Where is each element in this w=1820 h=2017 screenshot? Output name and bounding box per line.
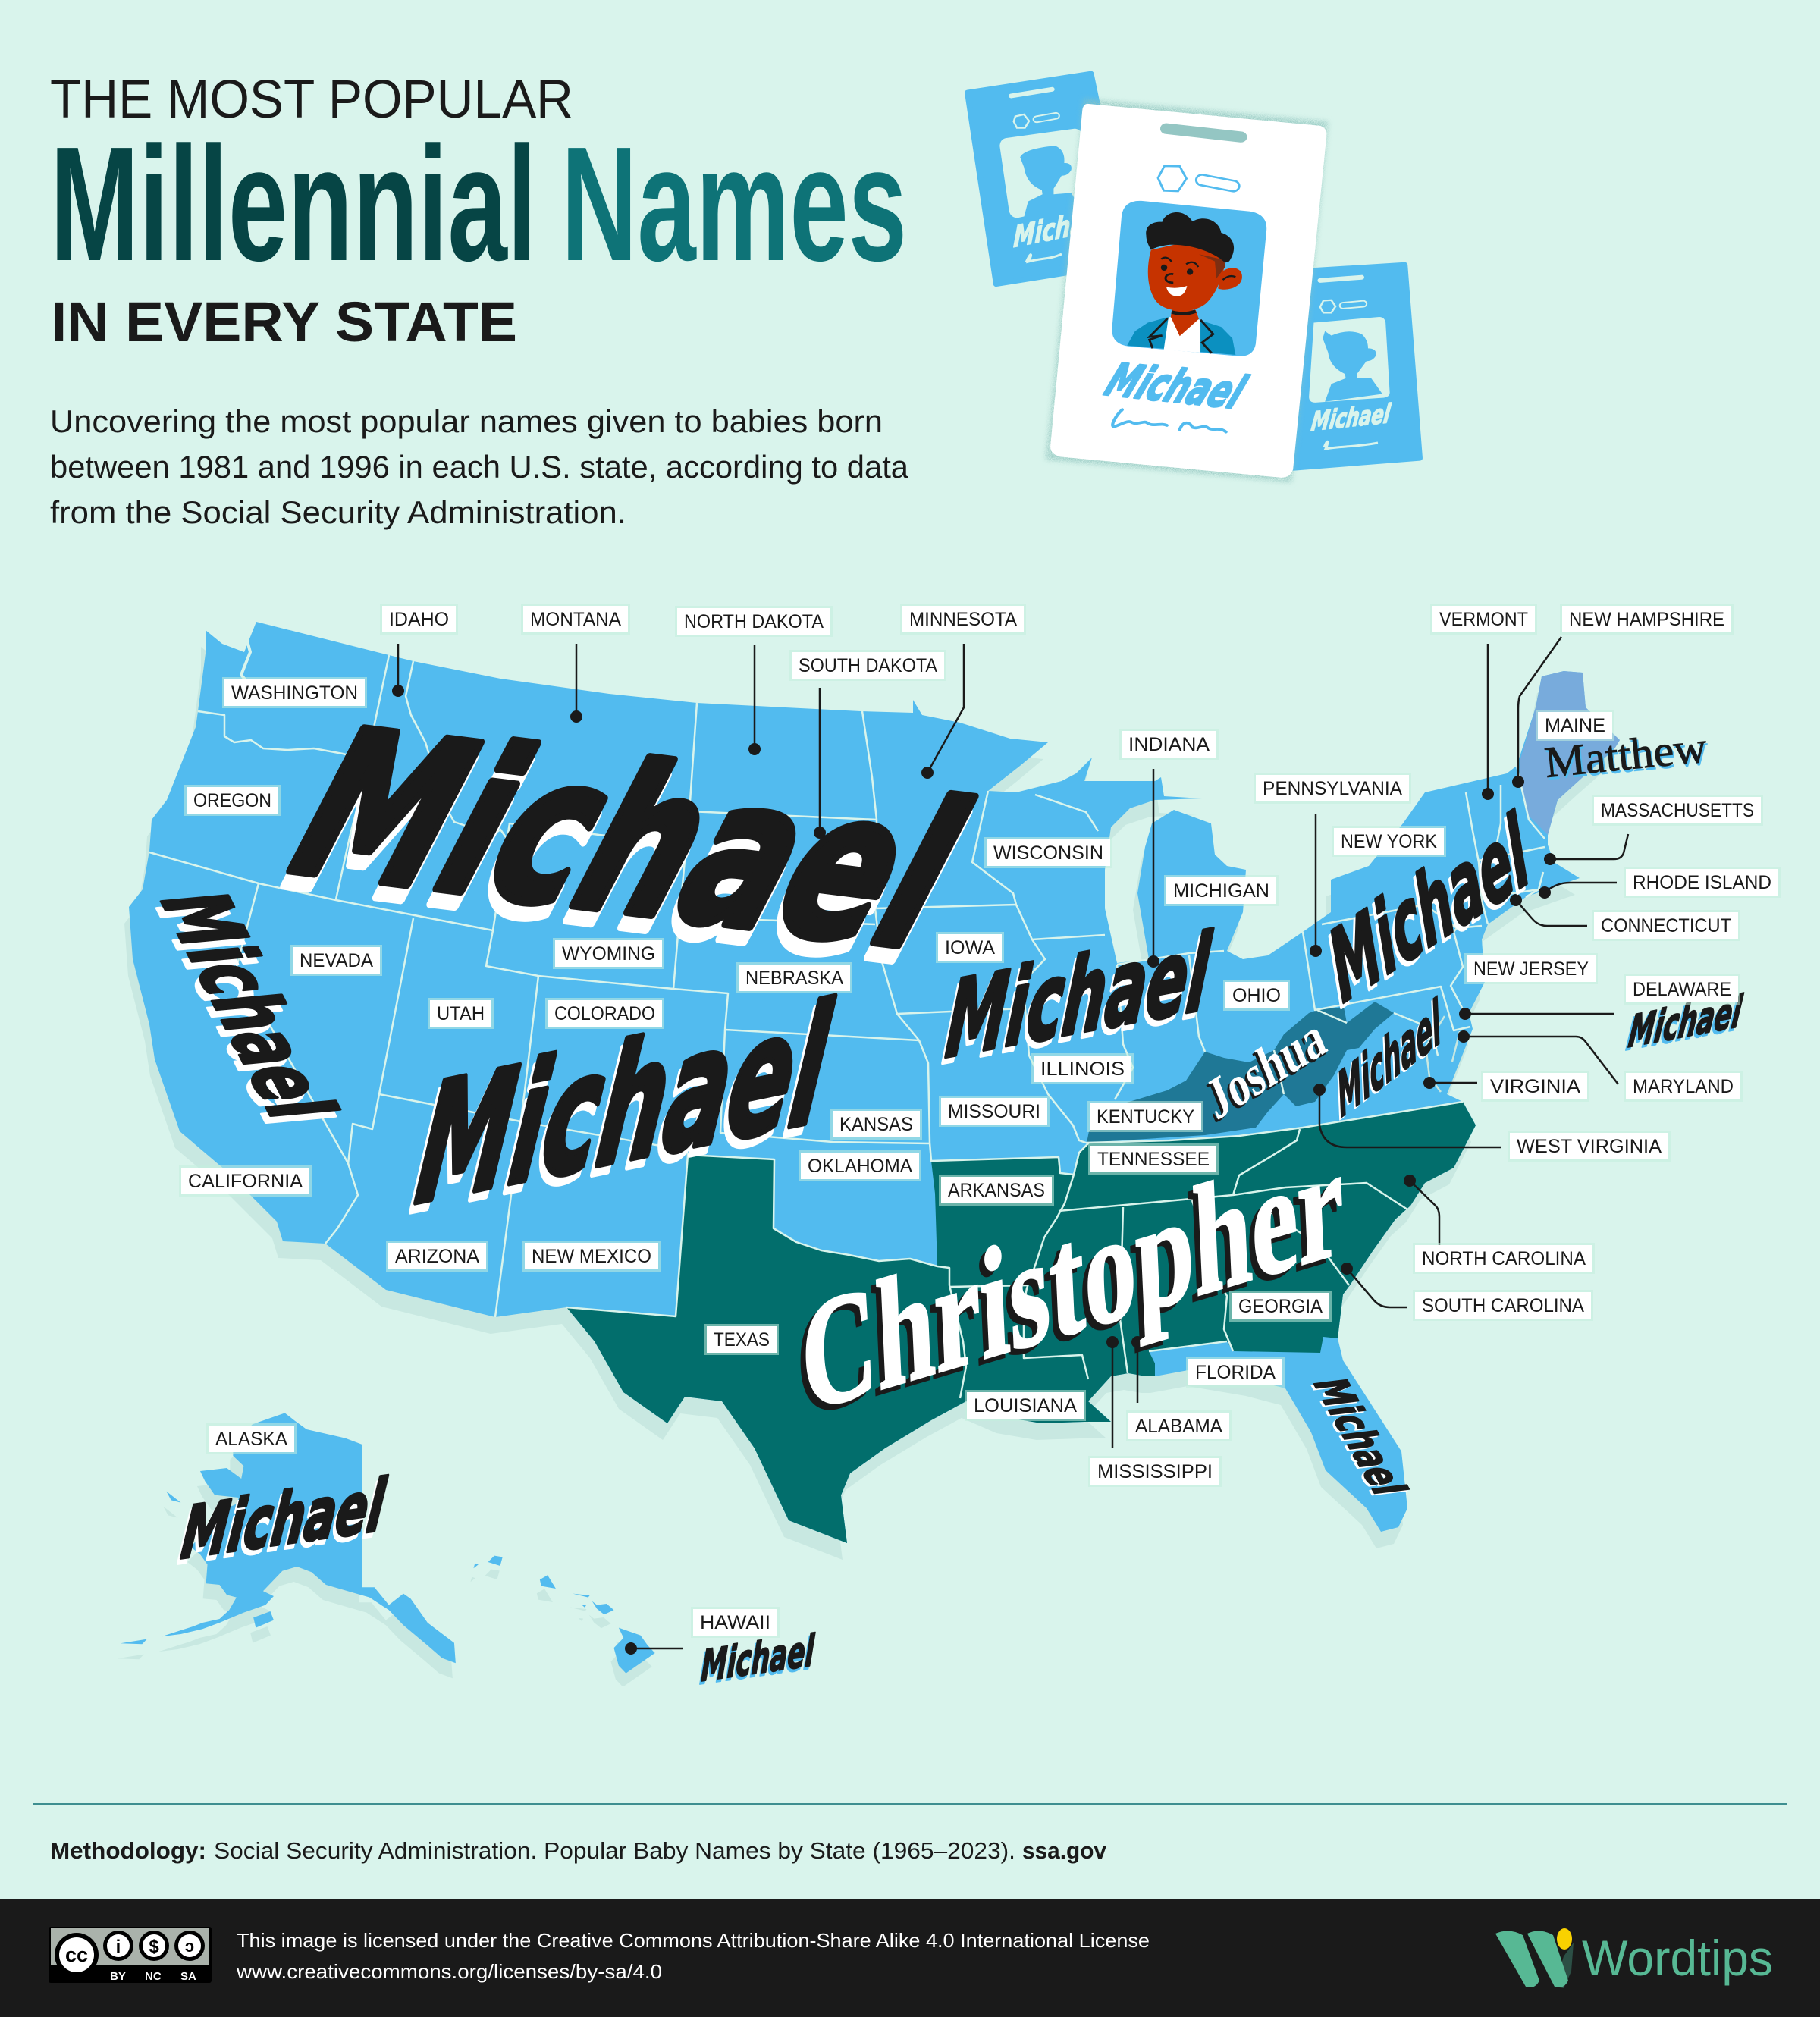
name: michael (new york and northeast): Michael — [1320, 794, 1539, 1026]
name: michael (delaware and maryland) — [1624, 986, 1745, 1061]
leader: delaware — [1459, 1008, 1614, 1020]
name: michael (midwest): Michael — [939, 918, 1213, 1088]
label: arkansas — [939, 1175, 1054, 1206]
name: michael (northwest, large): Michael — [263, 701, 982, 1010]
label: nevada: NEVADA — [300, 950, 373, 971]
name: michael (central states): Michael — [408, 968, 839, 1241]
label: kentucky — [1087, 1101, 1203, 1132]
label: texas — [704, 1324, 779, 1355]
label: tennessee — [1088, 1143, 1219, 1175]
intro paragraph: between 1981 and 1996 in each U.S. state, according to data — [50, 449, 909, 485]
leader: new hampshire — [1512, 637, 1561, 788]
methodology note: Social Security Administration. Popular Baby Names by State (1965–2023). — [214, 1837, 1015, 1864]
title line: the most popular: THE MOST POPULAR — [50, 70, 573, 130]
label: north carolina — [1413, 1243, 1595, 1274]
name: joshua (kentucky and west virginia): Joshua — [1197, 1005, 1334, 1133]
name: michael (central states) — [403, 968, 839, 1250]
icon: creative commons badge: NC — [145, 1970, 162, 1983]
map: hawaii — [470, 1556, 655, 1687]
leader: south carolina — [1341, 1263, 1407, 1307]
label: tennessee: TENNESSEE — [1097, 1149, 1210, 1170]
name: michael (alaska) — [174, 1464, 390, 1581]
state borders — [149, 629, 1545, 1398]
name: michael (alaska): Michael — [177, 1464, 390, 1576]
map: contiguous united states — [124, 622, 1620, 1560]
label: louisiana: LOUISIANA — [974, 1395, 1077, 1416]
label: rhode island — [1624, 867, 1781, 898]
footer band — [0, 1899, 1820, 2017]
label: florida: FLORIDA — [1195, 1362, 1276, 1383]
name: michael (alaska): Michael — [174, 1470, 387, 1581]
label: alabama: ALABAMA — [1135, 1416, 1222, 1437]
label: hawaii — [691, 1607, 780, 1638]
leader: connecticut — [1510, 894, 1587, 926]
intro paragraph: from the Social Security Administration. — [50, 494, 626, 530]
label: vermont: VERMONT — [1439, 609, 1528, 630]
label: utah: UTAH — [437, 1003, 485, 1024]
label: new york: NEW YORK — [1341, 831, 1437, 852]
label: minnesota — [900, 604, 1026, 635]
label: california: CALIFORNIA — [188, 1171, 303, 1192]
name: christopher (south): Christopher — [792, 1118, 1341, 1452]
icon: creative commons badge: i — [116, 1937, 121, 1957]
label: colorado: COLORADO — [554, 1003, 655, 1024]
region: michael states — [129, 622, 1620, 1543]
label: wisconsin — [984, 837, 1112, 868]
name: michael (florida) — [1301, 1373, 1416, 1502]
label: texas: TEXAS — [714, 1329, 770, 1350]
icon: creative commons badge: cc — [65, 1943, 88, 1966]
label: virginia — [1481, 1071, 1589, 1102]
label: arkansas: ARKANSAS — [948, 1180, 1045, 1201]
label: maine — [1536, 710, 1614, 741]
id card: main with portrait — [1046, 99, 1328, 482]
label: georgia: GEORGIA — [1238, 1296, 1323, 1317]
name: joshua (kentucky and west virginia): Joshua — [1195, 1008, 1332, 1136]
methodology note: Methodology: — [50, 1837, 206, 1864]
leader: virginia — [1423, 1077, 1477, 1089]
label: missouri — [939, 1096, 1050, 1127]
label: michigan: MICHIGAN — [1173, 880, 1269, 902]
label: washington: WASHINGTON — [231, 682, 358, 704]
label: wisconsin: WISCONSIN — [993, 842, 1103, 864]
label: south dakota — [789, 650, 946, 681]
label: new jersey: NEW JERSEY — [1473, 958, 1589, 980]
id card: right: Michael — [1310, 399, 1393, 438]
label: north carolina: NORTH CAROLINA — [1422, 1248, 1586, 1269]
leader: north carolina — [1404, 1175, 1439, 1246]
label: mississippi — [1088, 1456, 1222, 1487]
name: christopher (south): Christopher — [798, 1112, 1347, 1446]
name: matthew (maine): Matthew — [1544, 724, 1710, 789]
name: michael (virginia): Michael — [1332, 990, 1443, 1134]
label: pennsylvania — [1254, 773, 1411, 804]
name: christopher (south) — [792, 1112, 1347, 1452]
divider line — [33, 1803, 1787, 1805]
leader: pennsylvania — [1310, 814, 1322, 957]
name: michael (florida): Michael — [1303, 1373, 1416, 1501]
leader: massachusetts — [1544, 834, 1628, 865]
label: kansas — [830, 1109, 922, 1140]
icon: creative commons badge: ɔ — [185, 1937, 194, 1956]
label: virginia: VIRGINIA — [1490, 1076, 1580, 1097]
leader: montana — [570, 644, 582, 723]
leader: vermont — [1482, 644, 1494, 800]
label: connecticut — [1592, 910, 1740, 941]
title line: millennial: Millennial — [50, 112, 537, 295]
label: montana — [521, 604, 630, 635]
label: new mexico — [522, 1241, 661, 1272]
license text: www.creativecommons.org/licenses/by-sa/4.0 — [236, 1960, 662, 1983]
label: new mexico: NEW MEXICO — [532, 1246, 651, 1267]
label: maryland: MARYLAND — [1633, 1076, 1734, 1097]
label: wyoming — [553, 938, 664, 969]
label: ohio — [1223, 980, 1290, 1011]
leader: mississippi — [1106, 1336, 1119, 1448]
label: colorado — [545, 998, 664, 1029]
name: michael (central states): Michael — [403, 977, 835, 1250]
name: michael (hawaii): Michael — [698, 1630, 814, 1695]
title — [50, 70, 907, 353]
label: south carolina: SOUTH CAROLINA — [1422, 1295, 1584, 1316]
name: michael (florida): Michael — [1301, 1375, 1414, 1502]
region: kentucky and west virginia (joshua) — [1087, 1002, 1394, 1143]
name: matthew (maine): Matthew — [1542, 722, 1709, 787]
label: michigan — [1164, 875, 1279, 906]
leader: south dakota — [814, 688, 826, 839]
name on main card: Michael — [1098, 354, 1254, 419]
label: alabama — [1126, 1410, 1232, 1441]
label: utah — [428, 998, 494, 1029]
label: north dakota: NORTH DAKOTA — [684, 611, 824, 632]
label: west virginia: WEST VIRGINIA — [1517, 1136, 1662, 1157]
label: oregon — [184, 785, 281, 816]
label: new jersey — [1464, 953, 1598, 984]
license text: This image is licensed under the Creative Commons Attribution-Share Alike 4.0 International License — [237, 1929, 1150, 1952]
label: indiana: INDIANA — [1128, 734, 1210, 755]
label: maine: MAINE — [1545, 715, 1605, 736]
label: maryland — [1624, 1071, 1743, 1102]
name: michael (new york and northeast): Michael — [1317, 799, 1537, 1031]
label: illinois — [1031, 1053, 1134, 1084]
leader: minnesota — [921, 644, 964, 779]
icon: creative commons badge: BY — [110, 1970, 126, 1983]
name: michael (california and nevada): Michael — [140, 883, 355, 1128]
label: kansas: KANSAS — [839, 1114, 913, 1135]
label: south carolina — [1413, 1290, 1593, 1321]
label: new hampshire — [1560, 604, 1734, 635]
label: kentucky: KENTUCKY — [1097, 1106, 1194, 1128]
intro paragraph: Uncovering the most popular names given to babies born — [50, 403, 883, 439]
title line: in every state: IN EVERY STATE — [51, 290, 517, 353]
methodology note: ssa.gov — [1022, 1837, 1107, 1864]
name: michael (delaware and maryland): Michael — [1624, 989, 1743, 1061]
label: montana: MONTANA — [530, 609, 621, 630]
label: alaska — [206, 1423, 297, 1454]
label: nebraska: NEBRASKA — [745, 968, 843, 989]
label: idaho: IDAHO — [389, 609, 449, 630]
label: florida — [1186, 1357, 1285, 1388]
label: connecticut: CONNECTICUT — [1601, 915, 1731, 936]
icon: creative commons badge: SA — [180, 1970, 196, 1983]
label: north dakota — [675, 606, 833, 637]
label: georgia — [1229, 1291, 1332, 1322]
label: iowa: IOWA — [945, 937, 995, 958]
id card: left — [968, 74, 1130, 284]
label: new york — [1332, 826, 1446, 857]
logo: wordtips — [1495, 1928, 1773, 1988]
label: alaska: ALASKA — [215, 1429, 287, 1450]
label: nevada — [290, 945, 382, 976]
region: southern states (christopher) — [566, 1102, 1476, 1543]
name: michael (hawaii) — [698, 1626, 816, 1695]
label: rhode island: RHODE ISLAND — [1633, 872, 1771, 893]
intro paragraph — [50, 403, 909, 530]
id card: left: Michael — [1012, 202, 1108, 255]
label: ohio: OHIO — [1232, 985, 1281, 1006]
label: pennsylvania: PENNSYLVANIA — [1263, 778, 1402, 799]
label: new hampshire: NEW HAMPSHIRE — [1569, 609, 1724, 630]
label: vermont — [1430, 604, 1537, 635]
label: oklahoma — [799, 1150, 921, 1181]
leader: north dakota — [748, 645, 761, 755]
name: michael (northwest, large): Michael — [269, 686, 988, 995]
label: massachusetts: MASSACHUSETTS — [1601, 800, 1754, 821]
label: wyoming: WYOMING — [562, 943, 655, 965]
leader: indiana — [1147, 769, 1159, 968]
label: arizona: ARIZONA — [395, 1246, 479, 1267]
portrait — [1112, 201, 1266, 356]
name: michael (virginia): Michael — [1334, 987, 1445, 1132]
label: minnesota: MINNESOTA — [909, 609, 1017, 630]
illustration: id cards — [968, 74, 1420, 482]
leader: rhode island — [1539, 883, 1617, 899]
label: oklahoma: OKLAHOMA — [808, 1156, 912, 1177]
label: nebraska — [736, 962, 852, 993]
logo: wordtips: Wordtips — [1582, 1930, 1773, 1986]
region: maine (matthew) — [1520, 671, 1620, 835]
map shadow — [124, 638, 1615, 1560]
name: michael (delaware and maryland): Michael — [1626, 986, 1745, 1058]
label: arizona — [386, 1241, 488, 1272]
name: michael (california and nevada): Michael — [136, 890, 350, 1135]
name: michael (hawaii): Michael — [700, 1626, 816, 1692]
leader: maryland — [1458, 1030, 1618, 1084]
label: idaho — [380, 604, 458, 635]
label: south dakota: SOUTH DAKOTA — [799, 655, 937, 676]
label: missouri: MISSOURI — [948, 1101, 1040, 1122]
label: indiana — [1119, 729, 1219, 760]
label: washington — [222, 677, 367, 708]
map: alaska — [118, 1413, 456, 1678]
leader: idaho — [392, 644, 404, 697]
title line: names: Names — [561, 112, 907, 295]
label: massachusetts — [1592, 795, 1763, 826]
label: illinois: ILLINOIS — [1040, 1059, 1125, 1080]
label: california — [179, 1165, 312, 1197]
label: mississippi: MISSISSIPPI — [1097, 1461, 1213, 1482]
name: michael (california and nevada) — [136, 883, 355, 1135]
label: west virginia — [1508, 1131, 1671, 1162]
name: michael (new york and northeast) — [1317, 794, 1539, 1031]
leader: alabama — [1131, 1336, 1144, 1403]
label: oregon: OREGON — [193, 790, 271, 811]
label: delaware — [1624, 974, 1740, 1005]
name: michael (midwest) — [939, 911, 1216, 1088]
icon: creative commons badge: $ — [149, 1937, 159, 1957]
label: hawaii: HAWAII — [700, 1612, 770, 1633]
name: michael (midwest): Michael — [942, 911, 1216, 1082]
leader: west virginia — [1313, 1084, 1501, 1147]
license text — [236, 1929, 1150, 1983]
name: michael (virginia) — [1332, 987, 1445, 1134]
label: louisiana — [965, 1390, 1086, 1421]
icon: creative commons badge — [49, 1927, 212, 1983]
label: delaware: DELAWARE — [1633, 979, 1731, 1000]
leader: hawaii — [625, 1642, 682, 1655]
id card: right — [1293, 265, 1420, 468]
label: iowa — [936, 932, 1004, 963]
